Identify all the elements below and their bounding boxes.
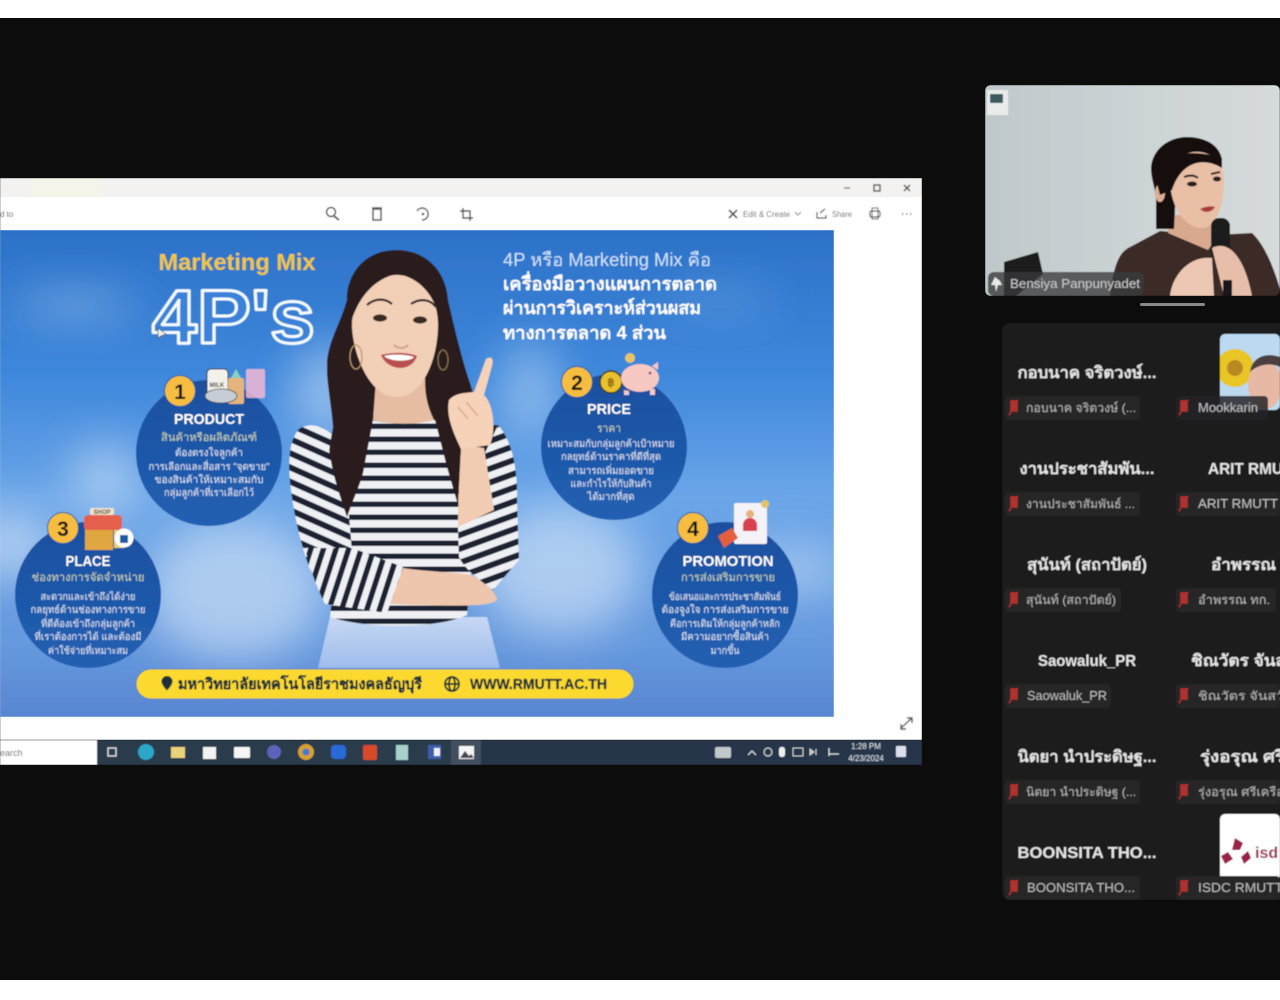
windows taskbar — [0, 740, 922, 765]
participant row 1: Mookkarin — [1198, 400, 1258, 415]
contact banner: WWW.RMUTT.AC.TH — [470, 676, 607, 693]
avatar: ISD logo: isd — [1255, 845, 1278, 862]
price text: ได้มากที่สุด — [587, 489, 634, 503]
promotion text: การส่งเสริมการขาย — [681, 572, 775, 584]
contact banner — [136, 669, 634, 699]
left arm upper — [289, 425, 352, 570]
place text: ที่เราต้องการได้ และต้องมี — [34, 629, 142, 643]
panel: place — [15, 508, 161, 668]
heading: Marketing Mix: Marketing Mix — [158, 249, 316, 275]
place text: สะดวกและเข้าถึงได้ง่าย — [40, 591, 136, 603]
promotion text: มากขึ้น — [710, 643, 740, 657]
number badge 2 — [562, 366, 592, 398]
participant row 4 — [1005, 652, 1280, 708]
place text: ที่ดีต้องเข้าถึงกลุ่มลูกค้า — [41, 616, 135, 630]
face — [352, 275, 438, 397]
pointing hand — [448, 358, 493, 449]
neck — [1168, 215, 1218, 250]
price text: ราคา — [597, 423, 621, 435]
clouds — [0, 291, 850, 660]
definition text: ทางการตลาด 4 ส่วน — [503, 323, 667, 343]
contact banner: มหาวิทยาลัยเทคโนโลยีราชมงคลธัญบุรี — [178, 674, 423, 694]
icon: location pin — [162, 676, 172, 690]
expand icon — [901, 718, 912, 729]
avatar: ISD logo — [1220, 814, 1280, 880]
definition text: เครื่องมือวางแผนการตลาด — [503, 271, 717, 294]
face — [1170, 152, 1224, 228]
viewer toolbar: Share — [832, 210, 853, 219]
wall thermostat — [987, 90, 1008, 115]
participant row 3: อำพรรณ ทก. — [1198, 593, 1270, 607]
heading: 4P's neon outline: 4P's — [152, 275, 315, 360]
right sleeve — [458, 425, 519, 590]
place text: PLACE — [66, 553, 110, 570]
torso — [330, 420, 472, 626]
black object on table — [1004, 252, 1043, 296]
panel: product — [136, 369, 282, 526]
window frame — [0, 178, 922, 740]
icon: shop and bag: SHOP — [93, 510, 111, 516]
price text: สามารถเพิ่มยอดขาย — [568, 463, 654, 477]
pinned app icons — [108, 740, 481, 765]
participant row 3: สุนันท์ (สถาปัตย์) — [1026, 593, 1116, 608]
icon: shop and bag — [84, 508, 134, 550]
participant row 4: ชิณวัตร จันส — [1191, 652, 1280, 670]
participant row 5: นิตยา นำประดิษฐ... — [1018, 748, 1156, 767]
number badge 3 — [48, 512, 78, 544]
participant row 4: ชิณวัตร จันสวั — [1198, 689, 1280, 703]
participant row 5: นิตยา นำประดิษฐ (... — [1026, 785, 1136, 799]
number badge 4: 4 — [687, 518, 699, 541]
panel: price — [541, 353, 687, 520]
speaker name label: Bensiya Panpunyadet — [1010, 276, 1140, 291]
place text: กลยุทธ์ด้านช่องทางการขาย — [30, 604, 146, 616]
facial features — [350, 300, 448, 370]
front hair — [1156, 153, 1222, 195]
system tray — [715, 742, 906, 763]
back hair — [1151, 137, 1222, 229]
number badge 4 — [678, 512, 708, 544]
product text: กลุ่มลูกค้าที่เราเลือกไว้ — [164, 485, 254, 499]
price text: PRICE — [587, 401, 631, 418]
woman presenter photo illustration — [289, 250, 519, 668]
speaker figure — [1110, 137, 1280, 296]
system tray: 4/23/2024 — [848, 754, 884, 763]
participant row 6: BOONSITA THO... — [1018, 845, 1156, 862]
number badge 1 — [164, 376, 196, 406]
marketing mix poster — [0, 230, 850, 717]
hair parting — [352, 274, 436, 318]
viewer toolbar — [0, 208, 912, 221]
icon: product items — [205, 369, 265, 404]
icon: promotion poster and tag — [718, 500, 769, 548]
promotion text: PROMOTION — [682, 553, 774, 570]
product text: สินค้าหรือผลิตภัณฑ์ — [161, 431, 257, 444]
number badge 1: 1 — [174, 381, 186, 404]
participant gallery — [1002, 323, 1280, 900]
price text: เหมาะสมกับกลุ่มลูกค้าเป้าหมาย — [548, 438, 674, 450]
participant row 6 — [1005, 845, 1280, 900]
participant row 4: Saowaluk_PR — [1038, 653, 1136, 670]
viewer toolbar: d to — [0, 210, 14, 219]
search box: earch — [0, 748, 23, 758]
participant row 5: รุ่งอรุณ ศรีเครือ — [1198, 785, 1280, 800]
sky background — [0, 230, 834, 717]
hands holding microphone — [1170, 258, 1214, 296]
place text: ช่องทางการจัดจำหน่าย — [32, 572, 144, 584]
promotion text: ข้อเสนอและการประชาสัมพันธ์ — [669, 591, 781, 603]
price text — [548, 401, 674, 503]
place text — [30, 553, 146, 657]
title bar — [0, 178, 922, 197]
promotion text: คือการเติมให้กลุ่มลูกค้าหลัก — [670, 618, 780, 630]
icon: coin and piggy bank: ฿ — [608, 377, 614, 389]
participant row 2: ARIT RMUTT — [1198, 496, 1278, 511]
number badge 3: 3 — [57, 518, 69, 541]
icon: product items: MILK — [210, 383, 225, 389]
participant row 6: BOONSITA THO... — [1027, 880, 1135, 895]
number badge 2: 2 — [571, 372, 583, 395]
pants — [318, 617, 500, 668]
place text: ค่าใช้จ่ายที่เหมาะสม — [48, 643, 128, 657]
product text: ของสินค้าให้เหมาะสมกับ — [154, 474, 264, 486]
icon: globe — [445, 677, 459, 691]
crossed forearm — [390, 568, 497, 606]
participant row 4: Saowaluk_PR — [1027, 688, 1107, 703]
definition text: 4P หรือ Marketing Mix คือ — [503, 250, 711, 270]
system tray: 1:28 PM — [851, 742, 881, 751]
speaker name label — [988, 272, 1144, 296]
participant row 2 — [1005, 460, 1280, 516]
icon: coin and piggy bank — [600, 353, 659, 395]
shared screen window — [0, 178, 922, 740]
avatar: Mookkarin — [1216, 334, 1280, 410]
participant row 2: งานประชาสัมพัน... — [1020, 460, 1154, 478]
participant row 3 — [1005, 555, 1276, 612]
participant row 6: ISDC RMUTT — [1198, 880, 1280, 895]
search box — [0, 740, 97, 765]
promotion text: มีความอยากซื้อสินค้า — [681, 629, 769, 643]
participant row 3: สุนันท์ (สถาปัตย์) — [1027, 555, 1147, 575]
viewer toolbar: Edit & Create — [743, 210, 791, 219]
participant row 5: รุ่งอรุณ ศรี — [1200, 747, 1280, 767]
promotion text — [662, 553, 788, 657]
price text: และกำไรให้กับสินค้า — [570, 478, 652, 490]
promotion text: ต้องจูงใจ การส่งเสริมการขาย — [662, 604, 788, 616]
participant row 5 — [1005, 747, 1280, 804]
dress — [1110, 231, 1280, 296]
right forearm — [458, 445, 494, 527]
back hair — [327, 250, 470, 430]
left arm lower sleeve — [305, 548, 403, 613]
product text: การเลือกและสื่อสาร "จุดขาย" — [148, 459, 270, 473]
product text: ต้องตรงใจลูกค้า — [175, 447, 243, 459]
product text: PRODUCT — [174, 411, 244, 428]
participant row 2: งานประชาสัมพันธ์ ... — [1026, 497, 1135, 511]
speaker video tile — [985, 85, 1280, 296]
definition text — [503, 250, 717, 343]
participant row 1: กอบนาค จริตวงษ์ (... — [1026, 401, 1136, 415]
product text — [148, 411, 270, 499]
facial features — [1184, 172, 1221, 212]
participant row 1: กอบนาค จริตวงษ์... — [1018, 363, 1156, 382]
mouse pointer — [158, 328, 166, 338]
hair over shoulders — [328, 374, 481, 518]
participant row 3: อำพรรณ — [1211, 556, 1276, 574]
participant row 1 — [1005, 363, 1268, 420]
panel: promotion — [652, 500, 798, 668]
definition text: ผ่านการวิเคราะห์ส่วนผสม — [503, 297, 701, 318]
neck — [373, 378, 434, 424]
price text: กลยุทธ์ด้านราคาที่ดีที่สุด — [561, 449, 661, 463]
tile drag handle — [1140, 303, 1205, 306]
